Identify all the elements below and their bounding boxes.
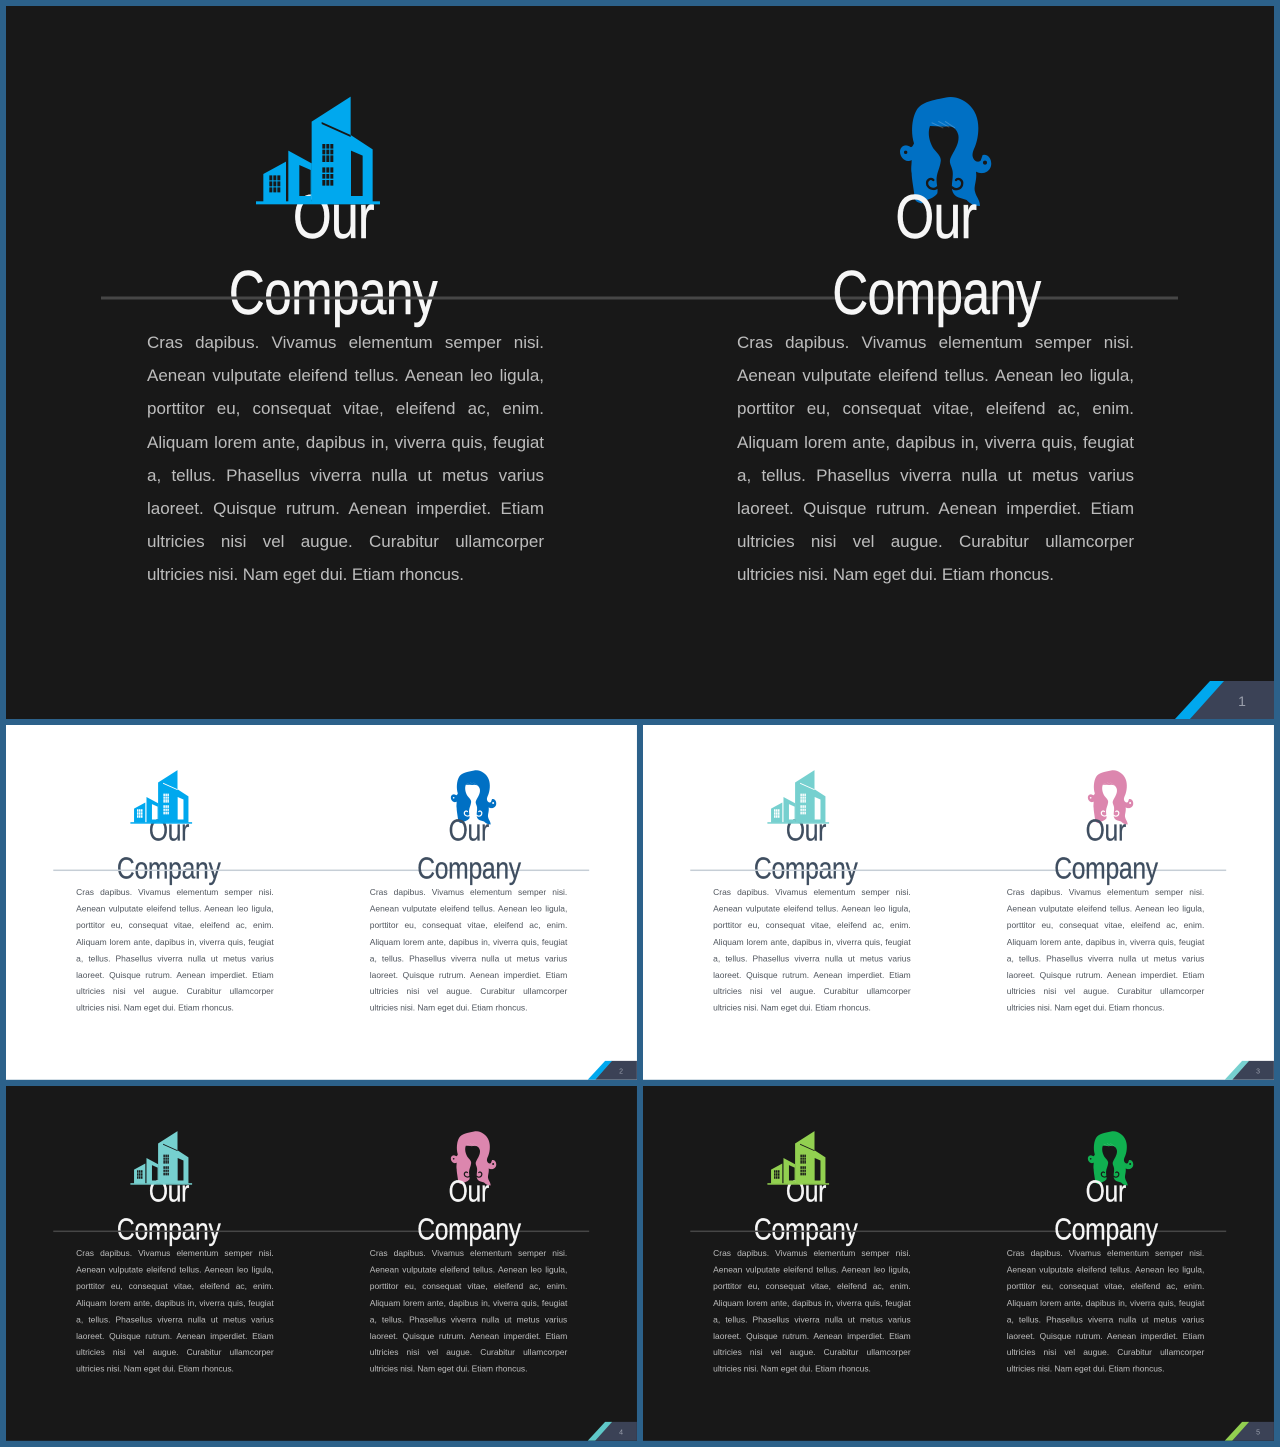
corner accent slash [588,1422,612,1441]
right text block: ultricies nisi. Nam eget dui. Etiam rhoncus. [1007,1364,1164,1374]
right text block: a, tellus. Phasellus viverra nulla ut metus varius [370,954,567,963]
left heading: Company [754,1212,858,1246]
left text block: Cras dapibus. Vivamus elementum semper nisi. [76,1249,274,1258]
left text block: a, tellus. Phasellus viverra nulla ut metus varius [713,954,911,963]
right heading: Our [449,813,489,847]
icon: building [767,770,829,824]
right heading: Company [417,1212,521,1246]
right heading [417,813,521,885]
left text block: ultricies nisi vel augue. Curabitur ullamcorper [76,987,274,996]
left text block: a, tellus. Phasellus viverra nulla ut metus varius [76,1315,274,1324]
page number: 2 [619,1067,623,1075]
right text block: Cras dapibus. Vivamus elementum semper nisi. [1007,888,1204,897]
panel: slide 2 white blue [6,725,637,1080]
right text block: a, tellus. Phasellus viverra nulla ut metus varius [1007,1315,1204,1324]
corner page tab [1232,1061,1274,1080]
icon: hair [451,770,496,825]
left text block: Cras dapibus. Vivamus elementum semper nisi. [147,333,544,352]
right text block: Cras dapibus. Vivamus elementum semper nisi. [737,333,1134,352]
left text block [713,888,911,1013]
left heading [229,182,438,327]
right text block: porttitor eu, consequat vitae, eleifend ac, enim. [1007,1282,1204,1291]
corner page tab [1232,1422,1274,1441]
icon: building [767,1131,829,1185]
right heading: Our [449,1174,489,1208]
left text block: ultricies nisi vel augue. Curabitur ullamcorper [713,1348,911,1357]
right text block: ultricies nisi. Nam eget dui. Etiam rhoncus. [370,1364,527,1374]
right heading: Our [896,182,976,251]
right text block: ultricies nisi vel augue. Curabitur ullamcorper [1007,1348,1204,1357]
left text block: laoreet. Quisque rutrum. Aenean imperdiet. Etiam [713,1331,911,1341]
right text block [1006,1249,1204,1374]
icon: building [130,1131,192,1185]
left text block: a, tellus. Phasellus viverra nulla ut metus varius [713,1315,911,1324]
left text block: porttitor eu, consequat vitae, eleifend ac, enim. [713,1282,911,1291]
right text block: laoreet. Quisque rutrum. Aenean imperdiet. Etiam [370,970,567,980]
left text block [147,333,544,584]
page number: 3 [1256,1067,1260,1075]
right text block: Aliquam lorem ante, dapibus in, viverra quis, feugiat [370,937,567,947]
left text block: laoreet. Quisque rutrum. Aenean imperdiet. Etiam [76,970,274,980]
divider line [101,296,1178,300]
left text block: Aenean vulputate eleifend tellus. Aenean leo ligula, [713,904,911,914]
left text block: Aenean vulputate eleifend tellus. Aenean leo ligula, [147,366,544,385]
right text block: ultricies nisi. Nam eget dui. Etiam rhoncus. [737,565,1054,584]
panel: slide 1 large dark [6,6,1274,719]
divider line [53,1231,589,1232]
left text block: Cras dapibus. Vivamus elementum semper nisi. [713,1249,911,1258]
right text block: Aenean vulputate eleifend tellus. Aenean leo ligula, [370,1265,567,1275]
icon: hair [900,97,991,206]
left text block: porttitor eu, consequat vitae, eleifend ac, enim. [76,1282,274,1291]
right text block: porttitor eu, consequat vitae, eleifend ac, enim. [370,1282,567,1291]
left text block: laoreet. Quisque rutrum. Aenean imperdiet. Etiam [713,970,911,980]
right text block: Cras dapibus. Vivamus elementum semper nisi. [370,888,567,897]
left heading [754,1174,858,1246]
right heading: Company [1054,851,1158,885]
right text block: ultricies nisi vel augue. Curabitur ullamcorper [737,532,1134,551]
left heading: Our [149,1174,189,1208]
right heading [417,1174,521,1246]
right text block [370,1249,568,1374]
left text block: Aliquam lorem ante, dapibus in, viverra quis, feugiat [713,937,911,947]
right text block: ultricies nisi. Nam eget dui. Etiam rhoncus. [370,1003,527,1013]
right text block: Aenean vulputate eleifend tellus. Aenean leo ligula, [370,904,567,914]
panel: slide 3 white teal pink [643,725,1274,1080]
left text block: Aliquam lorem ante, dapibus in, viverra quis, feugiat [713,1298,911,1308]
left text block: Aliquam lorem ante, dapibus in, viverra quis, feugiat [147,433,544,452]
right text block: Cras dapibus. Vivamus elementum semper nisi. [370,1249,567,1258]
right text block: Aliquam lorem ante, dapibus in, viverra quis, feugiat [1007,1298,1204,1308]
right heading [1054,813,1158,885]
right text block: ultricies nisi. Nam eget dui. Etiam rhoncus. [1007,1003,1164,1013]
corner page tab [1190,681,1274,719]
right text block: porttitor eu, consequat vitae, eleifend ac, enim. [370,921,567,930]
right heading: Company [832,258,1041,327]
left text block: ultricies nisi. Nam eget dui. Etiam rhoncus. [713,1003,871,1013]
corner page tab [595,1422,637,1441]
left text block [713,1249,911,1374]
left text block: ultricies nisi. Nam eget dui. Etiam rhoncus. [713,1364,871,1374]
page number: 1 [1238,693,1246,709]
corner page tab [595,1061,637,1080]
left text block: Aenean vulputate eleifend tellus. Aenean leo ligula, [76,904,274,914]
right text block: a, tellus. Phasellus viverra nulla ut metus varius [370,1315,567,1324]
divider line [690,870,1226,871]
icon: building [130,770,192,824]
left text block: a, tellus. Phasellus viverra nulla ut metus varius [147,466,544,485]
left text block: porttitor eu, consequat vitae, eleifend ac, enim. [713,921,911,930]
left heading: Company [754,851,858,885]
left heading: Our [786,813,826,847]
left text block: Cras dapibus. Vivamus elementum semper nisi. [713,888,911,897]
right text block: laoreet. Quisque rutrum. Aenean imperdiet. Etiam [1007,1331,1204,1341]
left text block: ultricies nisi. Nam eget dui. Etiam rhoncus. [76,1364,234,1374]
icon: hair [1088,1131,1133,1186]
right text block: laoreet. Quisque rutrum. Aenean imperdiet. Etiam [370,1331,567,1341]
right text block [370,888,568,1013]
right text block: Aenean vulputate eleifend tellus. Aenean leo ligula, [1007,1265,1204,1275]
right text block: laoreet. Quisque rutrum. Aenean imperdiet. Etiam [1007,970,1204,980]
right heading [1054,1174,1158,1246]
right text block: Aenean vulputate eleifend tellus. Aenean leo ligula, [737,366,1134,385]
right text block: Aliquam lorem ante, dapibus in, viverra quis, feugiat [737,433,1134,452]
left heading: Company [229,258,438,327]
left text block: porttitor eu, consequat vitae, eleifend ac, enim. [147,399,544,418]
left heading: Our [786,1174,826,1208]
divider line [690,1231,1226,1232]
left heading: Company [117,851,221,885]
corner accent slash [1225,1422,1249,1441]
right text block: a, tellus. Phasellus viverra nulla ut metus varius [737,466,1134,485]
left text block: Aliquam lorem ante, dapibus in, viverra quis, feugiat [76,1298,274,1308]
corner accent slash [588,1061,612,1080]
corner accent slash [1175,681,1224,719]
right text block: Cras dapibus. Vivamus elementum semper nisi. [1007,1249,1204,1258]
right text block [737,333,1134,584]
page number: 5 [1256,1428,1260,1436]
left text block: ultricies nisi vel augue. Curabitur ullamcorper [147,532,544,551]
left text block: ultricies nisi. Nam eget dui. Etiam rhoncus. [76,1003,234,1013]
left text block: ultricies nisi. Nam eget dui. Etiam rhoncus. [147,565,464,584]
left text block: Cras dapibus. Vivamus elementum semper nisi. [76,888,274,897]
right text block: Aliquam lorem ante, dapibus in, viverra quis, feugiat [1007,937,1204,947]
icon: building [256,97,380,204]
left heading [117,1174,221,1246]
left text block: Aenean vulputate eleifend tellus. Aenean leo ligula, [76,1265,274,1275]
left heading [117,813,221,885]
corner accent slash [1225,1061,1249,1080]
left text block: a, tellus. Phasellus viverra nulla ut metus varius [76,954,274,963]
divider line [53,870,589,871]
right text block: ultricies nisi vel augue. Curabitur ullamcorper [1007,987,1204,996]
right text block: Aenean vulputate eleifend tellus. Aenean leo ligula, [1007,904,1204,914]
right text block [1006,888,1204,1013]
left text block: Aliquam lorem ante, dapibus in, viverra quis, feugiat [76,937,274,947]
right text block: Aliquam lorem ante, dapibus in, viverra quis, feugiat [370,1298,567,1308]
left text block: ultricies nisi vel augue. Curabitur ullamcorper [713,987,911,996]
left heading: Company [117,1212,221,1246]
left text block: ultricies nisi vel augue. Curabitur ullamcorper [76,1348,274,1357]
left text block: laoreet. Quisque rutrum. Aenean imperdiet. Etiam [147,499,544,518]
left heading: Our [293,182,374,251]
left text block: Aenean vulputate eleifend tellus. Aenean leo ligula, [713,1265,911,1275]
icon: hair [1088,770,1133,825]
left text block: porttitor eu, consequat vitae, eleifend ac, enim. [76,921,274,930]
panel: slide 5 dark green [643,1086,1274,1441]
right heading [832,182,1041,327]
left heading: Our [149,813,189,847]
right text block: laoreet. Quisque rutrum. Aenean imperdiet. Etiam [737,499,1134,518]
right text block: porttitor eu, consequat vitae, eleifend ac, enim. [1007,921,1204,930]
right heading: Company [1054,1212,1158,1246]
left text block [76,1249,274,1374]
right heading: Company [417,851,521,885]
page number: 4 [619,1428,623,1436]
panel: slide 4 dark teal pink [6,1086,637,1441]
right text block: ultricies nisi vel augue. Curabitur ullamcorper [370,987,567,996]
right heading: Our [1086,813,1126,847]
right text block: porttitor eu, consequat vitae, eleifend ac, enim. [737,399,1134,418]
icon: hair [451,1131,496,1186]
right heading: Our [1086,1174,1126,1208]
right text block: a, tellus. Phasellus viverra nulla ut metus varius [1007,954,1204,963]
right text block: ultricies nisi vel augue. Curabitur ullamcorper [370,1348,567,1357]
left heading [754,813,858,885]
left text block [76,888,274,1013]
left text block: laoreet. Quisque rutrum. Aenean imperdiet. Etiam [76,1331,274,1341]
